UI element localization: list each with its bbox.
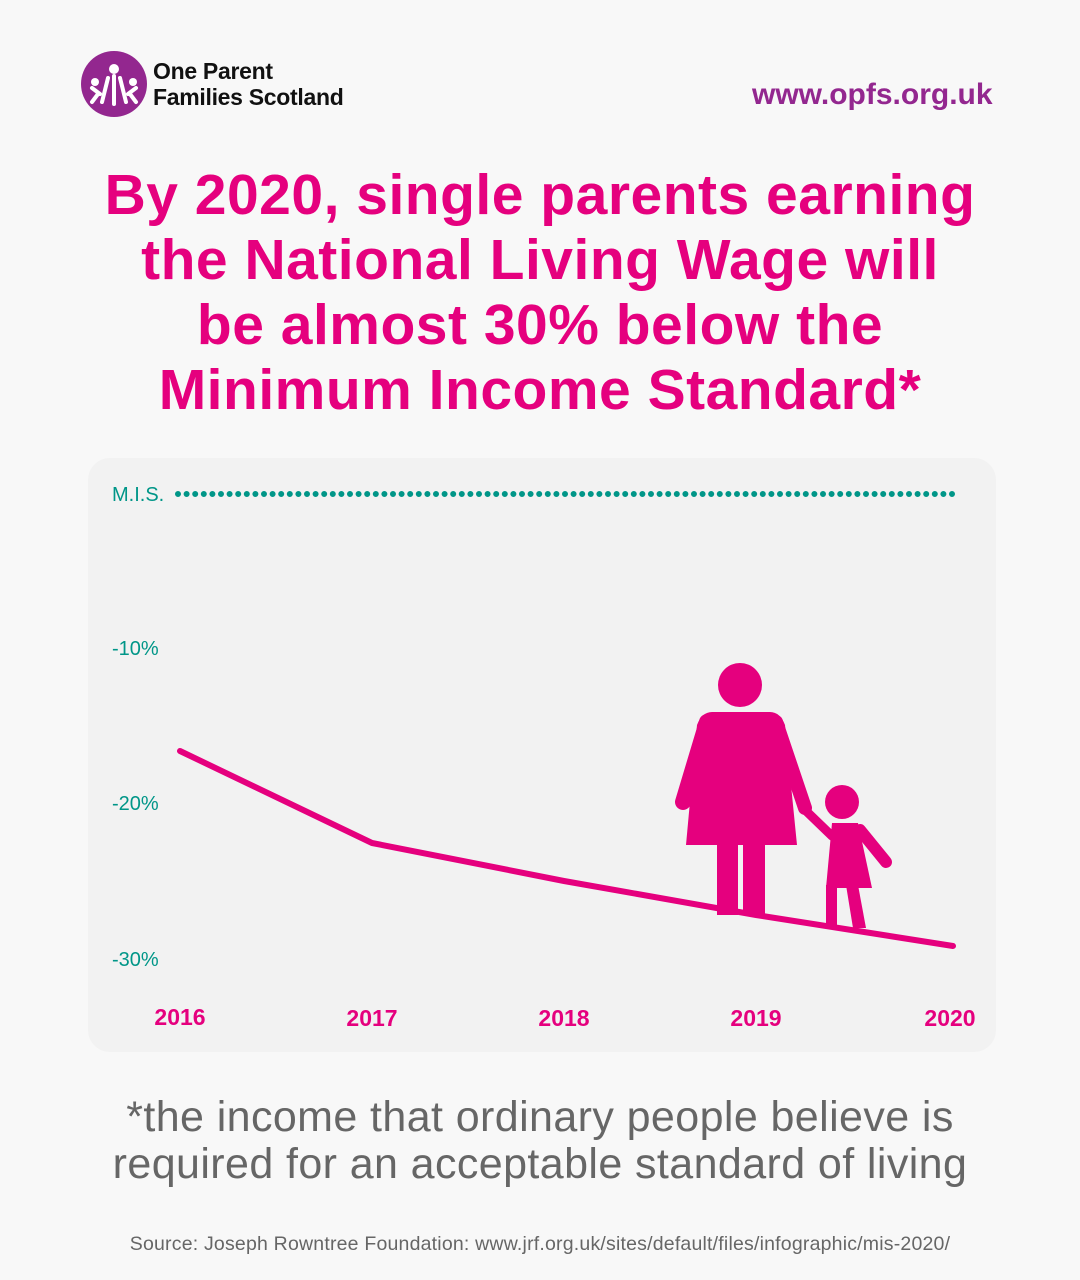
footnote <box>113 1093 967 1188</box>
x-axis labels: 2016 <box>154 1004 206 1030</box>
footnote: *the income that ordinary people believe is <box>126 1093 954 1141</box>
y-axis labels: M.I.S. <box>112 484 164 506</box>
logo text: One Parent <box>153 58 273 84</box>
MIS dotted line <box>178 491 955 497</box>
source: Source: Joseph Rowntree Foundation: www.jrf.org.uk/sites/default/files/infographic/mis-2020/ <box>130 1233 950 1255</box>
title: be almost 30% below the <box>197 293 883 357</box>
icon: logo circle <box>81 51 147 117</box>
y-axis labels: -10% <box>112 638 159 660</box>
data line <box>180 751 953 946</box>
footnote: required for an acceptable standard of living <box>113 1140 967 1188</box>
title: the National Living Wage will <box>141 228 939 292</box>
title: Minimum Income Standard* <box>159 358 921 422</box>
y-axis labels: -20% <box>112 793 159 815</box>
x-axis labels: 2017 <box>346 1005 398 1031</box>
y-axis labels: -30% <box>112 949 159 971</box>
x-axis labels <box>154 1004 976 1031</box>
y-axis labels <box>112 484 164 971</box>
title <box>105 163 975 422</box>
icon: mother and child <box>683 663 886 928</box>
panel: chart <box>88 458 996 1052</box>
x-axis labels: 2019 <box>730 1005 782 1031</box>
title: By 2020, single parents earning <box>105 163 975 227</box>
logo text <box>153 58 343 110</box>
logo <box>81 51 343 117</box>
x-axis labels: 2020 <box>924 1005 976 1031</box>
website url: www.opfs.org.uk <box>752 78 993 111</box>
logo text: Families Scotland <box>153 84 343 110</box>
x-axis labels: 2018 <box>538 1005 590 1031</box>
